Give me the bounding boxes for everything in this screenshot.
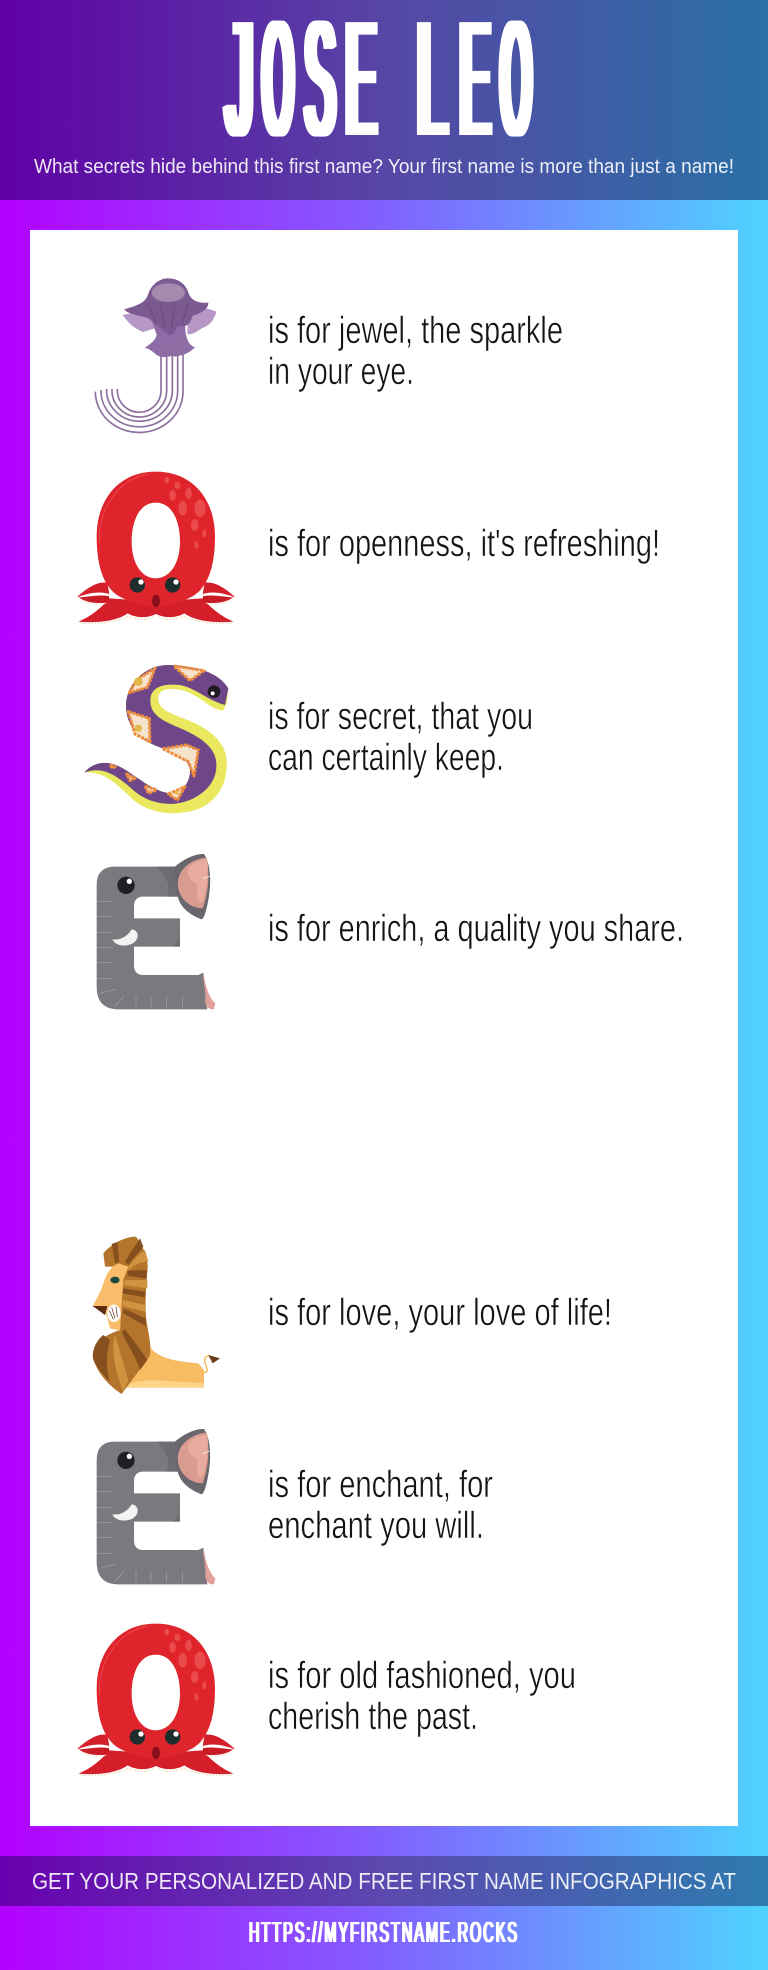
icon: snake letter S [84,665,228,813]
icon: elephant letter E (second) [97,1429,215,1584]
text: O second: is for old fashioned, you [268,1655,576,1697]
text: E second [268,1464,493,1547]
panel: white card [30,230,738,1826]
text: L: is for love, your love of life! [268,1292,612,1334]
text: S [268,696,533,779]
subtitle: What secrets hide behind this first name? Your first name is more than just a name! [34,156,734,178]
icon: lion letter L [93,1237,220,1394]
icon: octopus letter O [77,472,235,623]
text: E second: is for enchant, for [268,1464,493,1506]
text: O second [268,1655,576,1738]
footer band [0,1856,768,1906]
text: E second: enchant you will. [268,1505,484,1547]
text: S: can certainly keep. [268,737,504,779]
text: J [268,310,563,393]
text: S: is for secret, that you [268,696,533,738]
text: J: in your eye. [268,351,414,393]
icon: octopus letter O (second) [77,1624,235,1775]
header band [0,0,768,200]
icon: jellyfish letter J [95,278,217,432]
text: O: is for openness, it's refreshing! [268,523,660,565]
text: J: is for jewel, the sparkle [268,310,563,352]
text: O second: cherish the past. [268,1696,478,1738]
icon: elephant letter E [97,854,215,1009]
